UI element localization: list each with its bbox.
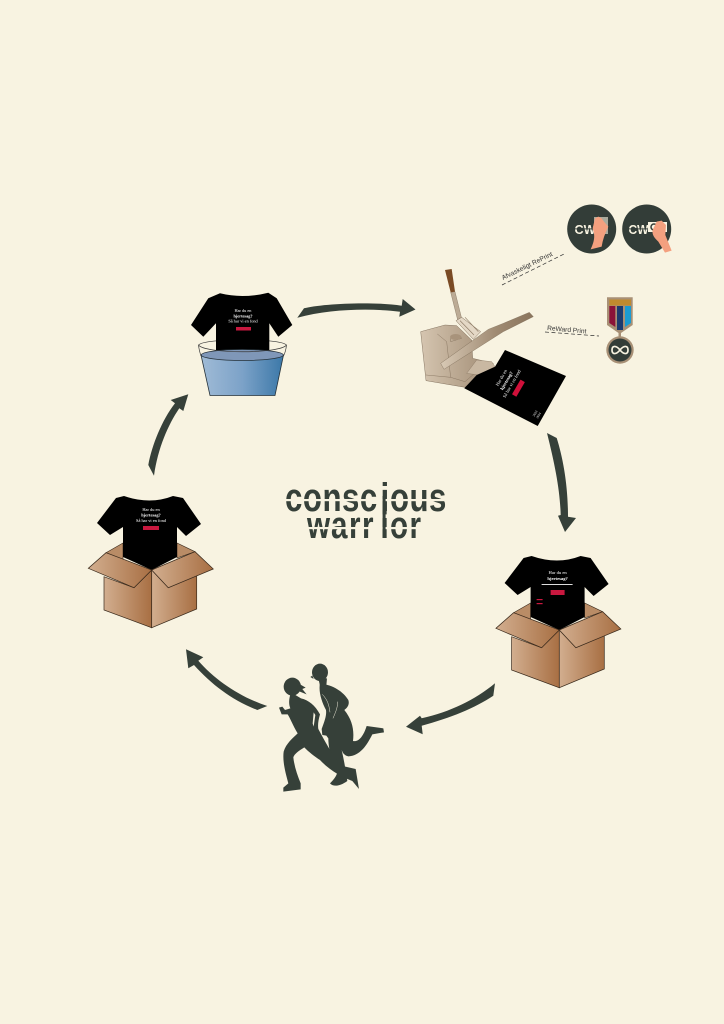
icon: t-shirt in box (left): hjertesag?: [141, 513, 161, 518]
icon: heat press with t-shirt: 2024: [535, 411, 542, 419]
icon: t-shirt in box (right): Har du en: [549, 570, 567, 575]
icon: second reprint badge with hand: [622, 204, 672, 254]
press body: [421, 325, 493, 387]
icon: t-shirt in water tub: Så har vi en fond: [228, 319, 259, 324]
lower plate: [467, 360, 495, 375]
icon: runners silhouette: [279, 664, 384, 792]
logo: conscious warrior: conscious: [285, 475, 446, 520]
label: Afvaskeligt RePrint: Afvaskeligt RePrint: [501, 251, 554, 282]
logo: conscious warrior: [283, 475, 447, 547]
icon: t-shirt in box (right): hjertesag?: [547, 576, 569, 581]
press arm: [451, 292, 462, 320]
icon: removable reprint badge with hand: [567, 204, 616, 254]
label: ReWard Print: ReWard Print: [547, 325, 587, 335]
press links: [456, 317, 481, 339]
icon: heat press with t-shirt: hjertesag?: [499, 370, 514, 391]
icon: t-shirt in box (left): Så har vi en fond: [136, 518, 167, 523]
icon: heat press with t-shirt: Så har vi en fond: [502, 368, 522, 399]
upper platen: [441, 312, 533, 369]
icon: second reprint badge with hand: CW: [628, 222, 649, 237]
arrow: press to box: [547, 433, 576, 532]
icon: t-shirt in box (right): [496, 556, 621, 688]
printed t-shirt: [464, 350, 566, 426]
icon: heat press with t-shirt: Har du en: [495, 368, 508, 387]
icon: heat press with t-shirt: [421, 269, 566, 426]
arrow: box to runners: [406, 683, 495, 734]
press handle: [445, 269, 455, 292]
runner: woman: [279, 678, 359, 792]
icon: t-shirt in box (left): [88, 496, 213, 628]
runner: man: [310, 664, 384, 786]
arrow: box to tub: [148, 394, 188, 476]
icon: t-shirt in box (left): Har du en: [142, 507, 160, 512]
icon: heat press with t-shirt: 2023: [532, 409, 539, 417]
logo: conscious warrior: warrior: [306, 505, 421, 547]
arrow: runners to box: [186, 649, 267, 710]
icon: t-shirt in water tub: [191, 293, 292, 396]
icon: removable reprint badge with hand: CW: [574, 222, 596, 237]
icon: t-shirt in water tub: hjertesag?: [233, 313, 253, 318]
icon: medal: [606, 297, 634, 364]
icon: t-shirt in water tub: Har du en: [235, 308, 252, 313]
label: ReWard Print: [545, 325, 599, 336]
runner detail lines: [322, 694, 338, 718]
arrow: tub to press: [297, 299, 416, 318]
